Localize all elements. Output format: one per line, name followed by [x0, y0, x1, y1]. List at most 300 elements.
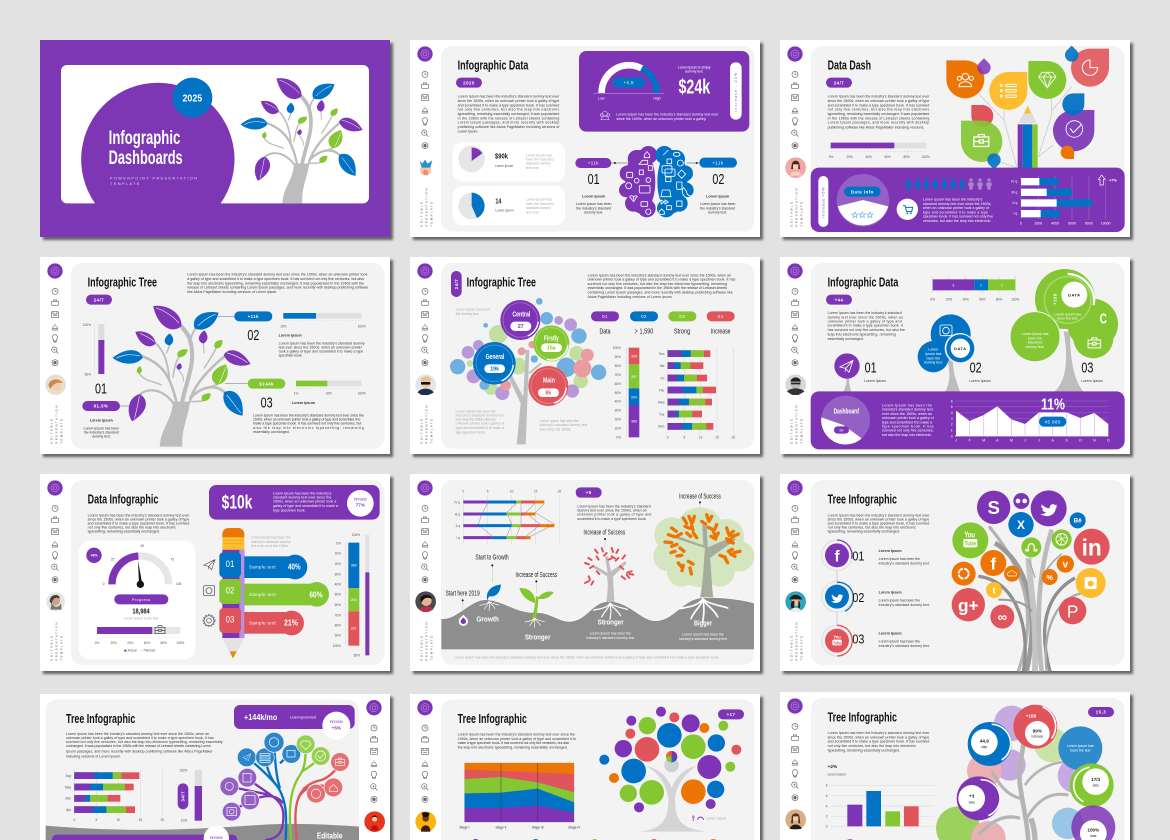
panel: content [46, 700, 359, 840]
text block: standard dummy text ever since the 1500s, [923, 202, 991, 206]
mini pie [847, 838, 853, 840]
chart: area: 6 [951, 399, 953, 403]
body text: leap into electronic typesetting, remaining [828, 332, 896, 336]
panel: gauge: since the 1500s, when an unknown printer took a galley. [616, 117, 706, 121]
text block: 01 [84, 418, 119, 439]
panel: white card [61, 65, 369, 203]
avatar [785, 157, 806, 178]
card: gauge: 60% [144, 641, 150, 645]
tree 02: Ipsum has [925, 352, 942, 356]
tree 03: been the [1028, 336, 1042, 340]
body text: unknown printer took a galley of type and scrambled it to make a type specimen book. It has [66, 736, 214, 740]
pill: +5 [576, 487, 602, 498]
stage: bigger tree: Lorem Ipsum has been the [682, 633, 724, 637]
chart: stacked column: 60% [615, 382, 621, 386]
chart: stacked bars: 0 [73, 818, 75, 822]
body text: dummy text ever since the 1500s, when an [577, 508, 647, 512]
tree 02 [918, 314, 975, 392]
drop: small blue top [1062, 46, 1081, 64]
callout: $10k: galley of type and scrambled it to make a [273, 504, 338, 508]
card: gauge [79, 541, 195, 660]
illustration: tree with faded circles [450, 298, 606, 444]
chart: stacked column: 30% [615, 409, 621, 413]
chart: area: D [1107, 438, 1110, 442]
legend labels: Increase [711, 327, 730, 336]
avatar [785, 809, 806, 830]
panel: gauge: Lorem Ipsum has been the industry's standard dummy text ever [616, 113, 719, 117]
chart: connected stacked bars: III q [455, 512, 460, 516]
chart: area: 2 [951, 423, 953, 427]
chart: stream area: Stage IV [568, 825, 581, 829]
sidebar caption [50, 622, 64, 661]
drop: purple check [1053, 110, 1094, 151]
panel: gauge: $24k [678, 76, 711, 98]
chart: stacked bars: May [65, 785, 71, 789]
text block [923, 198, 993, 223]
stage: bigger tree: industry's standard dummy text [679, 637, 727, 641]
bubble: main: 8k [545, 391, 551, 397]
sidebar caption: TEMPLATE [60, 635, 64, 661]
text block: type and scrambled it to make a [882, 420, 932, 424]
tree 03: Lorem Ipsum has [1022, 332, 1049, 336]
body text: Lorem Ipsum has been the industry's standard dummy text ever [458, 95, 560, 99]
bubble: red: 99% [1033, 728, 1043, 733]
text block: tree note left: type and scrambled it to make a [456, 426, 504, 430]
chart: area: J [955, 438, 957, 442]
chart: columns: 8 [826, 784, 828, 788]
pill: left +11k with connector: +11k [588, 161, 599, 166]
drop: green briefcase [961, 121, 1002, 162]
chart: stacked bars: 10 [117, 818, 120, 822]
nodes: purple [220, 768, 259, 821]
chart: stacked column: 80% [615, 364, 621, 368]
text block: 03: Lorem Ipsum has been the industry's standard dummy text ever since the [253, 413, 364, 417]
tree 01 [834, 353, 860, 392]
heading: Data Dash [828, 59, 871, 73]
chart: stacked column: 40% [335, 582, 341, 586]
chart: stacked bar: 2 [1001, 283, 1003, 287]
card: gauge: 100% [176, 641, 185, 645]
row: facebook: f [834, 548, 840, 565]
sidebar caption [790, 188, 804, 227]
chart: stacked bars: 20 [732, 435, 735, 439]
pill: vertical 24/7: 24/7 [454, 279, 459, 289]
bubble: general [473, 342, 516, 385]
illustration: pencil [1018, 106, 1038, 169]
text block: 02 [700, 172, 736, 215]
panel: content [441, 263, 754, 449]
drop: small orange [1061, 146, 1074, 159]
legend labels [599, 327, 730, 336]
band: 01 40%: 40% [288, 563, 301, 572]
callout: +144k/mo: +5% [332, 726, 342, 731]
subtitle [110, 177, 198, 186]
body text: Lorem Ipsum has been the industry's standard dummy text ever [88, 513, 190, 517]
text block: 02: Lorem Ipsum [279, 334, 302, 338]
body text: survived not only five centuries, but also the leap into electronic typesetting, remaining [588, 282, 727, 286]
text block: 01: Lorem Ipsum has been [84, 426, 119, 430]
row: facebook [822, 540, 930, 571]
sidebar caption [790, 622, 804, 661]
card: gauge: 100 [176, 582, 182, 586]
band: 03 21% [219, 608, 304, 635]
illustration: tree [978, 732, 1068, 840]
chart: stacked bars: Apr [66, 808, 71, 812]
callout: $10k: 77% [356, 503, 366, 508]
bubbles: red network group [952, 529, 1110, 629]
legend labels: > 1,590 [635, 327, 653, 336]
band: 02 60%: 02 [226, 586, 234, 596]
body text [187, 273, 368, 294]
sidebar caption: PRESENTATION [55, 622, 59, 661]
heading: Tree Infographic [828, 492, 897, 506]
chart: stacked column: 100% [333, 644, 341, 648]
bubble: main [528, 366, 568, 406]
chart: area [951, 396, 1110, 442]
bubbles: green network group: Tube [965, 540, 976, 547]
body text: not only five centuries, but also the leap into electronic [828, 744, 916, 748]
band: 03 21%: 21% [284, 619, 298, 628]
text block: tree note right: ever since the 1500s. [540, 427, 571, 431]
band: 01 40% [219, 552, 307, 579]
bubbles: red network group: ∞ [998, 609, 1008, 624]
callout: +144k/mo: Increase [330, 719, 343, 724]
pill: 15,3 [1088, 707, 1114, 717]
body text: unknown printer took a galley of type and scrambled it to make a type specimen book. It has [588, 278, 736, 282]
chart: stacked bar [930, 276, 1020, 302]
callout: $10k [209, 485, 380, 520]
chart: stacked bars: Mar [66, 797, 71, 801]
body text: Lorem Ipsum has been the industry's standard dummy text ever [828, 95, 930, 99]
avatar [785, 591, 806, 612]
text block: specimen book. It has survived not only five [923, 215, 993, 219]
body text [458, 95, 560, 133]
chart: horizontal bars: +7% [1109, 178, 1118, 183]
sidebar caption: TEMPLATE [800, 635, 804, 661]
chart: connected stacked bars: 20 [558, 489, 561, 493]
bubble: green: data [1093, 784, 1099, 788]
slide 12: overlapping bubbles tree [780, 692, 1130, 840]
chart: connected stacked bars: II q [456, 524, 460, 528]
body text: Lorem Ipsum passages, and more recently with desktop [458, 121, 559, 125]
body text: typesetting, remaining essentially unchanged. [828, 530, 900, 534]
icon: plane [204, 560, 215, 570]
chart: area: J [1038, 438, 1040, 442]
bubble: main: Main [543, 376, 555, 385]
chart: stacked column: 80% [335, 623, 341, 627]
chart: stacked bars: Fri [661, 376, 665, 380]
bubble: general: 19k [490, 366, 499, 372]
sidebar icons [366, 700, 382, 802]
body text [66, 732, 223, 759]
chart: stacked bars: 5 [683, 435, 685, 439]
chart: stacked column: 297 [351, 627, 357, 631]
stage: bigger tree: Increase of Success [679, 492, 721, 501]
stage: stronger tree: Stronger [598, 618, 624, 627]
label 01 [864, 360, 886, 383]
sidebar caption [790, 405, 804, 444]
card: pie 90k: text ever. [526, 166, 540, 170]
bar: 02 [280, 313, 366, 328]
pill: +11k [217, 311, 272, 321]
callout: +144k/mo: Lorem ipsum text [290, 715, 316, 719]
body text: dummy text ever since the 1500s, when an [828, 315, 903, 319]
chart: stacked bar: 40% [963, 298, 969, 302]
slide 6: infographic data with trees [780, 257, 1130, 454]
row: twitter: Lorem Ipsum [879, 590, 902, 594]
legend labels: Data [599, 327, 611, 336]
bubble: green: 17/3 [1091, 777, 1101, 782]
subtitle: TEMPLATE [110, 182, 141, 186]
tree 03: industry's [1028, 341, 1043, 345]
card: pie 90k: Lorem Ipsum has [526, 153, 552, 157]
panel: gauge: High [653, 96, 661, 100]
text block: 03: Lorem Ipsum [292, 401, 316, 405]
chart: stacked bars: 10 [699, 435, 703, 439]
sidebar caption: PRESENTATION [795, 405, 799, 444]
bubble: central: 27 [518, 324, 524, 330]
sidebar caption: EDITABLE [790, 418, 794, 444]
chart: connected stacked bars: 15 [534, 489, 538, 493]
text block: 01: 01 [588, 172, 600, 188]
tree 03: C [1100, 311, 1107, 327]
legend dots [473, 838, 716, 840]
chart: stacked column: 50% [615, 391, 621, 395]
card: pie 14: Lorem Ipsum has [526, 198, 552, 202]
text block: tree note top: Lorem Ipsum has been [456, 308, 490, 312]
pill: right +11k with connector [687, 158, 737, 168]
illustration: tree trunk fan [978, 526, 1085, 671]
bubbles: green network group: You [964, 530, 975, 539]
callout: +144k/mo [234, 705, 355, 740]
text block: 02: took a galley of type and scrambled it to make a type [279, 350, 363, 354]
avatar [785, 374, 806, 395]
chart: stacked column: 40% [615, 400, 621, 404]
body text: survived not only five centuries, but also the leap into electronic typesetting, remaining essentially [66, 740, 223, 744]
avatar [45, 374, 66, 395]
chart: stacked column: 0% [336, 541, 341, 545]
row: facebook: Lorem Ipsum [879, 549, 902, 553]
text block: tree note left: industry's standard dummy text [456, 413, 504, 417]
stage: growth: Start to Growth [475, 553, 509, 562]
legend labels: Strong [674, 327, 690, 336]
pill: 24/7: 24/7 [834, 80, 844, 85]
chart: stacked bar: 0% [930, 298, 935, 302]
bubble: blue: step [981, 745, 988, 749]
chart: connected stacked bars: I q [456, 536, 460, 540]
callout: $10k: $10k [222, 493, 253, 514]
chart: area: 4 [951, 411, 953, 415]
row: youtube [822, 625, 930, 656]
chart: stacked bars: Thu [659, 388, 665, 392]
pill: $144k: $144k [259, 381, 274, 386]
avatar [415, 374, 436, 395]
row: facebook: 01 [852, 549, 864, 564]
pill: 91,5% [82, 401, 129, 411]
tree 03: DATA [1068, 292, 1081, 297]
body text: and scrambled it to make a type specimen book. It has survived [88, 521, 189, 525]
chart: area: 1 [951, 429, 953, 433]
illustration: branch tree [229, 742, 340, 840]
sidebar caption: PRESENTATION [795, 622, 799, 661]
chart: stream area: Stage III [532, 825, 544, 829]
title: Infographic [109, 128, 180, 149]
chart: vertical gauge: 100% [179, 769, 188, 773]
body text: 1500s, when an unknown printer took a galley of type and scrambled it to [458, 737, 576, 741]
body text: unknown printer took a galley of type and [577, 513, 651, 517]
body text: typesetting, remaining essentially unchanged. It was popularised [828, 112, 929, 116]
text block: 03: make a type specimen book. It has survived not only five centuries, but [253, 422, 361, 426]
bar: 02: 100% [358, 324, 366, 328]
bubble: green [1070, 763, 1114, 807]
chart: connected stacked bars: 10 [510, 489, 514, 493]
pill: 2025 [456, 78, 482, 88]
row: twitter: 02 [852, 590, 864, 605]
tree 02: Lorem [928, 348, 938, 352]
pill: 91,5%: 91,5% [94, 404, 108, 409]
panel: gauge: dummy text. [685, 70, 704, 74]
stage: start here: Start here 2019 [445, 588, 480, 597]
chart: connected stacked bars [454, 489, 561, 545]
panel: content [441, 46, 754, 232]
drop: red left [971, 105, 993, 127]
icon: gear [203, 615, 215, 627]
text block: 01: Lorem Ipsum [90, 418, 114, 422]
body text: publishing software like Aldus PageMaker including versions. [828, 125, 924, 129]
label 02 [969, 360, 991, 383]
illustration: pencil [222, 528, 244, 659]
node icons [225, 738, 344, 816]
row: youtube: 03 [852, 631, 864, 646]
text block: 01: the industry's standard [576, 206, 611, 210]
bubble: general: General [486, 352, 504, 361]
text block: survived not only five centuries, [882, 429, 934, 433]
pill: 24/7 [86, 295, 112, 305]
chart: stacked bars: Avg [66, 774, 71, 778]
chart: stacked bar: 3 [952, 283, 954, 287]
body text: since the 1500s, when an unknown printer took a galley of type [828, 735, 929, 739]
panel: content [441, 700, 754, 840]
card: pie 14: 14 [495, 196, 502, 205]
tree 03 [1010, 269, 1118, 392]
badge: 2025 [172, 78, 212, 118]
body text: not only five centuries, but also the leap into electronic [828, 525, 916, 529]
pill: 24/7: 24/7 [94, 297, 104, 302]
chart: stacked column: 10% [615, 427, 621, 431]
band: 02 60%: Sample text [249, 592, 276, 597]
stage: stronger tree: Increase of Success [583, 528, 625, 537]
sidebar caption: EDITABLE [420, 635, 424, 661]
body text: Lorem Ipsum has been the industry's standard dummy text ever [828, 731, 930, 735]
legend: Lorem Ipsum [707, 816, 726, 820]
text block: centuries, but also the leap into electronic. [923, 219, 991, 223]
row: twitter: industry's standard dummy text. [879, 603, 930, 607]
text block: 01: Lorem Ipsum has been [576, 202, 612, 206]
sidebar icons [417, 700, 433, 802]
purple title circle [81, 83, 234, 208]
row: youtube: industry's standard dummy text. [879, 644, 930, 648]
heading: Data Infographic [88, 492, 158, 506]
bubble: firstly: 15a [547, 345, 556, 351]
chart: area: M [1010, 438, 1013, 442]
avatar [415, 811, 436, 832]
chart: area: M [982, 438, 985, 442]
tree 02: been the [927, 356, 940, 360]
heading: Infographic Tree [467, 276, 536, 290]
stat: +2%: +2% [828, 764, 838, 769]
label 01: Lorem Ipsum [864, 379, 886, 383]
stage: stronger seedling: Increase of Success [515, 570, 557, 579]
sidebar icons [47, 480, 63, 583]
text block: 03: also the leap into electronic typesetting, remaining [253, 426, 364, 430]
chart: area: 45 980 [1045, 419, 1061, 424]
text block: type specimen book. It has [882, 424, 934, 428]
bubble: purple bottom [1071, 805, 1115, 840]
panel: content [811, 46, 1124, 232]
chart: area: O [1079, 438, 1082, 442]
chart: stacked bars: Sat [660, 364, 664, 368]
bubbles: blue [599, 723, 725, 798]
bubble: red: +158 [1026, 714, 1037, 719]
pale bubbles [936, 706, 1092, 840]
text block: 01 [576, 172, 612, 215]
chart: vertical gauge [83, 323, 104, 377]
icon: camera [204, 586, 215, 596]
chart: area: J [1024, 438, 1026, 442]
card: pie 14: standard dummy [526, 206, 551, 210]
body text: including versions of Lorem Ipsum. [66, 755, 121, 759]
chart: stacked column: 10% [335, 552, 341, 556]
pill: +44 [826, 295, 852, 305]
band: 03 21%: Sample text [249, 621, 276, 626]
body text: the leap into electronic typesetting, remaining essentially unchanged. It was popularised in the 1960s with the [187, 281, 364, 285]
card: pie 90k: Lorem ipsum [495, 164, 514, 168]
text block [882, 403, 934, 437]
legend pills [591, 311, 735, 321]
bubbles: yellow network group [986, 568, 1106, 598]
label 03: Lorem Ipsum [1081, 379, 1103, 383]
bubble: blue [968, 722, 1012, 766]
text block: industry's standard dummy text [882, 408, 933, 412]
body text: publishing software like Aldus PageMaker including versions of [458, 125, 559, 129]
chart: vertical gauge [179, 769, 202, 823]
text block: 02: specimen book. [279, 354, 303, 358]
chart: vertical gauge: 100% [352, 533, 360, 537]
bubbles: blue network group: Bē [1074, 518, 1082, 525]
chart: vertical gauge [352, 533, 369, 658]
chart: stacked bars [65, 770, 164, 822]
chart: stacked column: 90% [335, 634, 341, 638]
number: 03: 03 [261, 395, 273, 411]
stage: growth: Growth [476, 614, 499, 623]
pill: 24/7 [826, 78, 852, 88]
sidebar caption: TEMPLATE [800, 418, 804, 444]
chart: stacked column: 30% [335, 572, 341, 576]
avatar [46, 592, 65, 611]
slide 11: bubble tree [410, 694, 760, 840]
chart: stacked column: 70% [615, 373, 621, 377]
slide 1: cover [40, 40, 390, 237]
stage: stronger tree: Lorem Ipsum has been the [590, 632, 631, 636]
sidebar caption: TEMPLATE [430, 418, 434, 444]
stat: +2% [828, 764, 846, 777]
card: gauge: Planned [144, 649, 155, 653]
text block: but also the leap into electronic. [882, 433, 932, 437]
body text: Lorem Ipsum passages, and more recently with desktop [828, 121, 929, 125]
chart: stacked bar: 100% [1011, 298, 1020, 302]
bubbles: orange network group: f [991, 554, 997, 573]
card: pie 90k: been the industry's [526, 157, 554, 161]
